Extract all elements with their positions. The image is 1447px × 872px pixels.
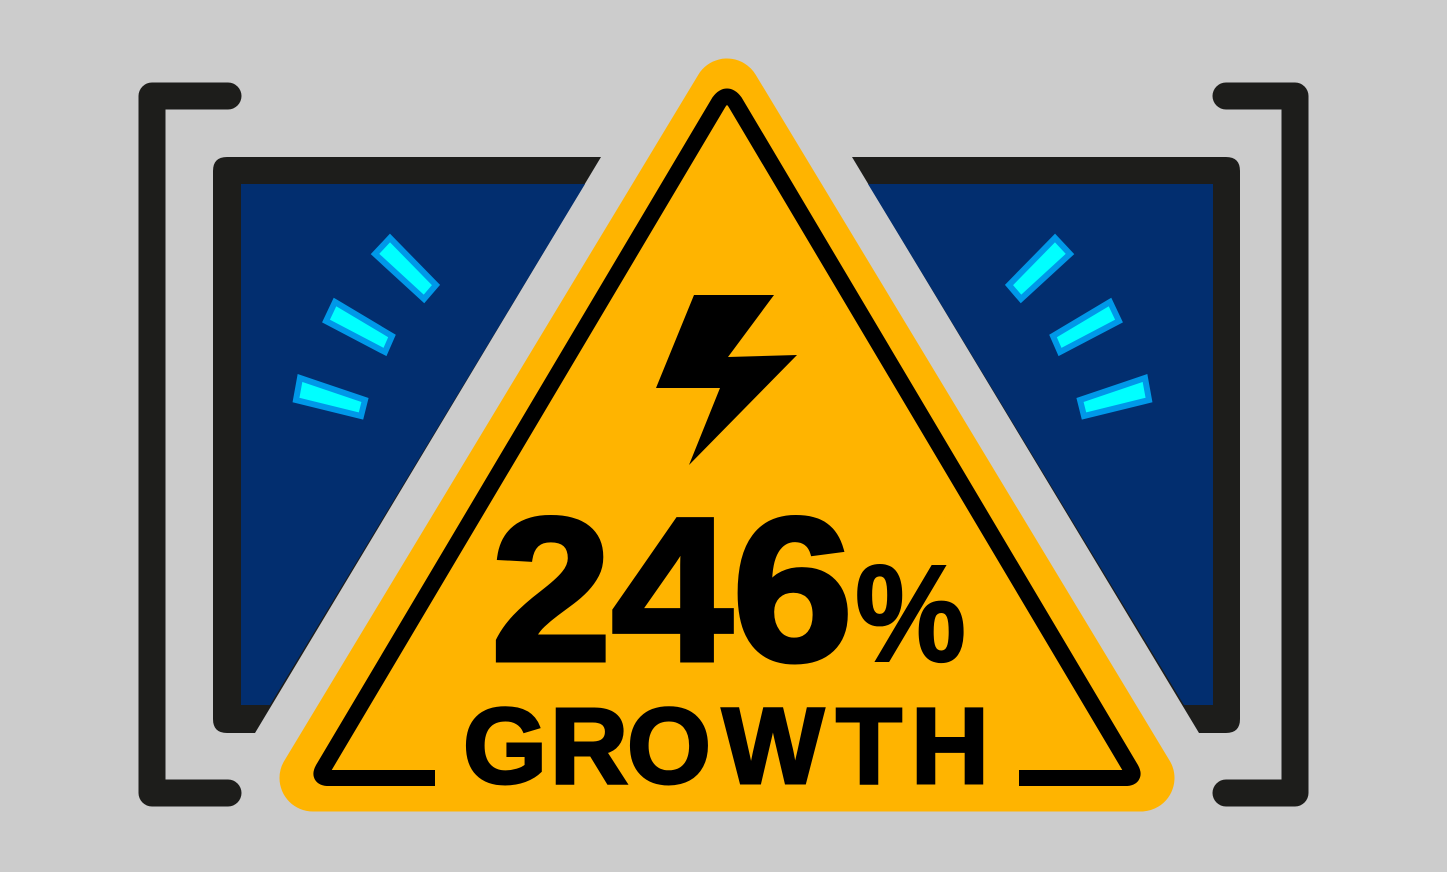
label: growth: GROWTH [463, 685, 989, 806]
right spark marks [1009, 238, 1149, 416]
figure: 246 percent: % [855, 537, 966, 691]
warning triangle [313, 92, 1141, 778]
triangle inner outline [321, 96, 1133, 778]
figure: 246 percent: 246 [491, 476, 853, 704]
icon: lightning bolt [656, 295, 797, 465]
left spark marks [296, 238, 436, 416]
right blue panel [852, 157, 1240, 733]
left outer bracket [152, 96, 228, 793]
left blue panel [213, 157, 601, 733]
right outer bracket [1226, 96, 1295, 793]
